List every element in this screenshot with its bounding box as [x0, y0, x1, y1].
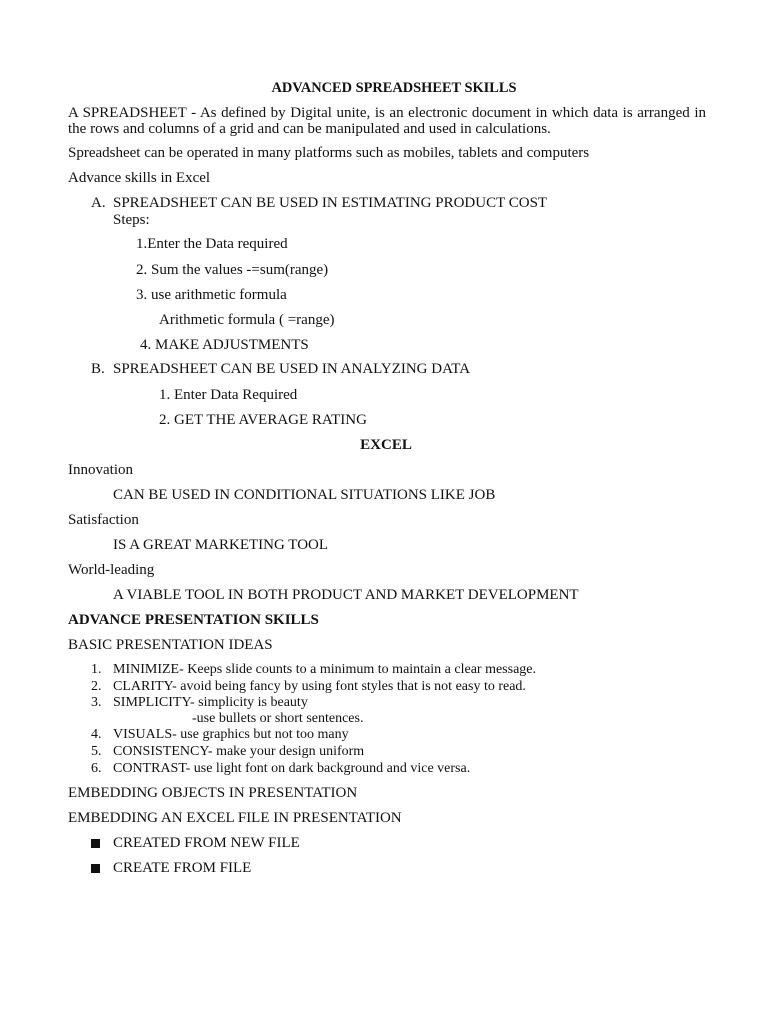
- excel heading: EXCEL: [360, 437, 412, 453]
- section B: B.: [91, 361, 105, 377]
- bullet 1: CREATED FROM NEW FILE: [113, 835, 300, 851]
- platforms line: Spreadsheet can be operated in many platforms such as mobiles, tablets and computers: [68, 145, 589, 161]
- world-leading detail: A VIABLE TOOL IN BOTH PRODUCT AND MARKET DEVELOPMENT: [113, 587, 579, 603]
- ideas list: 5.: [91, 744, 102, 759]
- ideas list: SIMPLICITY- simplicity is beauty: [113, 695, 308, 710]
- ideas list: 3.: [91, 695, 102, 710]
- ideas list: MINIMIZE- Keeps slide counts to a minimum to maintain a clear message.: [113, 662, 536, 677]
- ideas list: CLARITY- avoid being fancy by using font styles that is not easy to read.: [113, 679, 526, 694]
- ideas list: [91, 662, 536, 776]
- satisfaction detail: IS A GREAT MARKETING TOOL: [113, 537, 328, 553]
- title: ADVANCED SPREADSHEET SKILLS: [272, 80, 516, 96]
- ideas list: 6.: [91, 761, 102, 776]
- step 1: 1.Enter the Data required: [136, 236, 288, 252]
- ideas list: CONTRAST- use light font on dark background and vice versa.: [113, 761, 470, 776]
- ideas list: -use bullets or short sentences.: [192, 711, 363, 726]
- section A: A.: [91, 195, 106, 211]
- ideas list: VISUALS- use graphics but not too many: [113, 727, 349, 742]
- definition paragraph: [68, 105, 706, 137]
- arithmetic formula: Arithmetic formula ( =range): [159, 312, 334, 328]
- innovation detail: CAN BE USED IN CONDITIONAL SITUATIONS LIKE JOB: [113, 487, 495, 503]
- innovation: Innovation: [68, 462, 133, 478]
- embedding excel: EMBEDDING AN EXCEL FILE IN PRESENTATION: [68, 810, 402, 826]
- bullet 2: CREATE FROM FILE: [113, 860, 251, 876]
- ideas list: CONSISTENCY- make your design uniform: [113, 744, 364, 759]
- ideas list: 1.: [91, 662, 102, 677]
- section A: SPREADSHEET CAN BE USED IN ESTIMATING PRODUCT COST: [113, 195, 547, 211]
- step 4: 4. MAKE ADJUSTMENTS: [140, 337, 309, 353]
- embedding objects: EMBEDDING OBJECTS IN PRESENTATION: [68, 785, 357, 801]
- world-leading: World-leading: [68, 562, 154, 578]
- ideas list: 2.: [91, 679, 102, 694]
- satisfaction: Satisfaction: [68, 512, 139, 528]
- advance skills heading: Advance skills in Excel: [68, 170, 210, 186]
- ideas list: 4.: [91, 727, 102, 742]
- step 3: 3. use arithmetic formula: [136, 287, 287, 303]
- step 2: 2. Sum the values -=sum(range): [136, 262, 328, 278]
- B step 2: 2. GET THE AVERAGE RATING: [159, 412, 367, 428]
- B step 1: 1. Enter Data Required: [159, 387, 297, 403]
- definition paragraph: the rows and columns of a grid and can be manipulated and used in calculations.: [68, 121, 551, 137]
- definition paragraph: A SPREADSHEET - As defined by Digital unite, is an electronic document in which data is arranged in: [68, 105, 706, 121]
- section B: SPREADSHEET CAN BE USED IN ANALYZING DATA: [113, 361, 470, 377]
- steps label: Steps:: [113, 212, 150, 228]
- basic ideas heading: BASIC PRESENTATION IDEAS: [68, 637, 273, 653]
- presentation heading: ADVANCE PRESENTATION SKILLS: [68, 612, 319, 628]
